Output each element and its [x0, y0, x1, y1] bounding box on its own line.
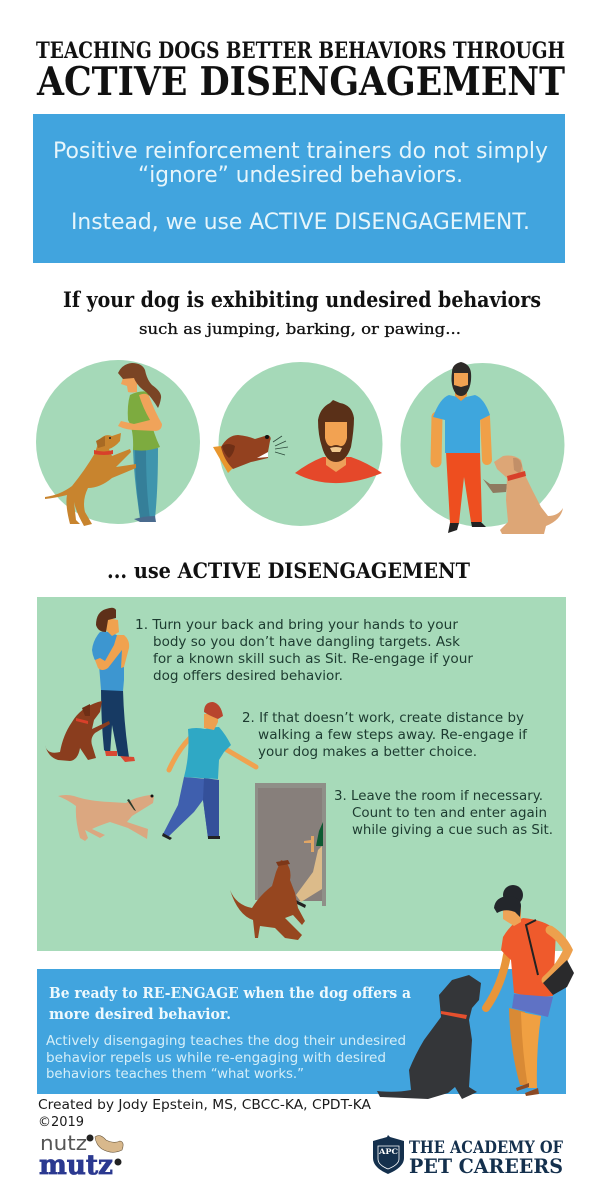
illustration: barking dog and bearded man	[213, 362, 382, 526]
illustration: man walking away with dog	[58, 702, 256, 841]
panel: re-engage: more desired behavior.	[49, 1005, 231, 1023]
heading: use active disengagement: ... use ACTIVE DISENGAGEMENT	[107, 558, 470, 583]
heading: undesired behaviors: If your dog is exhibiting undesired behaviors	[63, 287, 541, 312]
step 2 text	[242, 711, 527, 760]
illustration: door with hand and dog	[230, 783, 326, 940]
logo: academy of pet careers: PET CAREERS	[409, 1154, 563, 1178]
illustration: black dog	[377, 975, 481, 1099]
panel: intro: Instead, we use ACTIVE DISENGAGEMENT.	[71, 210, 530, 235]
step 2 text: your dog makes a better choice.	[258, 745, 477, 760]
step 1 text: dog offers desired behavior.	[153, 669, 343, 684]
panel: intro: Positive reinforcement trainers do not simply	[53, 139, 548, 164]
illustration: woman with bag	[486, 885, 574, 1096]
logo: academy of pet careers: THE ACADEMY OF	[409, 1138, 563, 1158]
logo: academy of pet careers	[373, 1135, 563, 1178]
illustration: man and pawing dog	[400, 362, 564, 534]
step 3 text	[334, 789, 553, 838]
logo: academy of pet careers: APC	[378, 1147, 398, 1156]
credit	[38, 1098, 371, 1130]
panel: re-engage: behaviors teaches them “what works.”	[46, 1067, 304, 1082]
step 3 text: Count to ten and enter again	[352, 806, 547, 821]
panel: intro: “ignore” undesired behaviors.	[138, 163, 463, 188]
logo: nutz mutz: mutz	[39, 1150, 113, 1181]
step 2 text: 2. If that doesn’t work, create distance by	[242, 711, 524, 726]
panel: re-engage: Actively disengaging teaches the dog their undesired	[46, 1034, 406, 1049]
step 3 text: while giving a cue such as Sit.	[352, 823, 553, 838]
panel: intro	[33, 114, 565, 263]
heading: undesired behaviors: such as jumping, barking, or pawing...	[139, 320, 461, 338]
illustration: woman and jumping dog	[36, 360, 200, 526]
credit: Created by Jody Epstein, MS, CBCC-KA, CPDT-KA	[38, 1098, 371, 1113]
title	[36, 38, 565, 105]
step 1 text: 1. Turn your back and bring your hands to your	[135, 618, 459, 633]
step 3 text: 3. Leave the room if necessary.	[334, 789, 543, 804]
heading: undesired behaviors	[63, 287, 541, 338]
credit: ©2019	[38, 1115, 84, 1130]
logo: nutz mutz	[39, 1131, 123, 1181]
panel: re-engage	[37, 969, 566, 1094]
step 1 text	[135, 618, 474, 684]
step 1 text: body so you don’t have dangling targets. Ask	[153, 635, 460, 650]
step 1 text: for a known skill such as Sit. Re-engage if your	[153, 652, 474, 667]
illustration: man turning back with dog	[45, 608, 135, 762]
logo: nutz mutz: nutz	[40, 1131, 87, 1155]
panel: re-engage: behavior repels us while re-engaging with desired	[46, 1051, 386, 1066]
step 2 text: walking a few steps away. Re-engage if	[258, 728, 527, 743]
panel: steps	[37, 597, 566, 951]
panel: re-engage: Be ready to RE-ENGAGE when the dog offers a	[49, 984, 411, 1002]
